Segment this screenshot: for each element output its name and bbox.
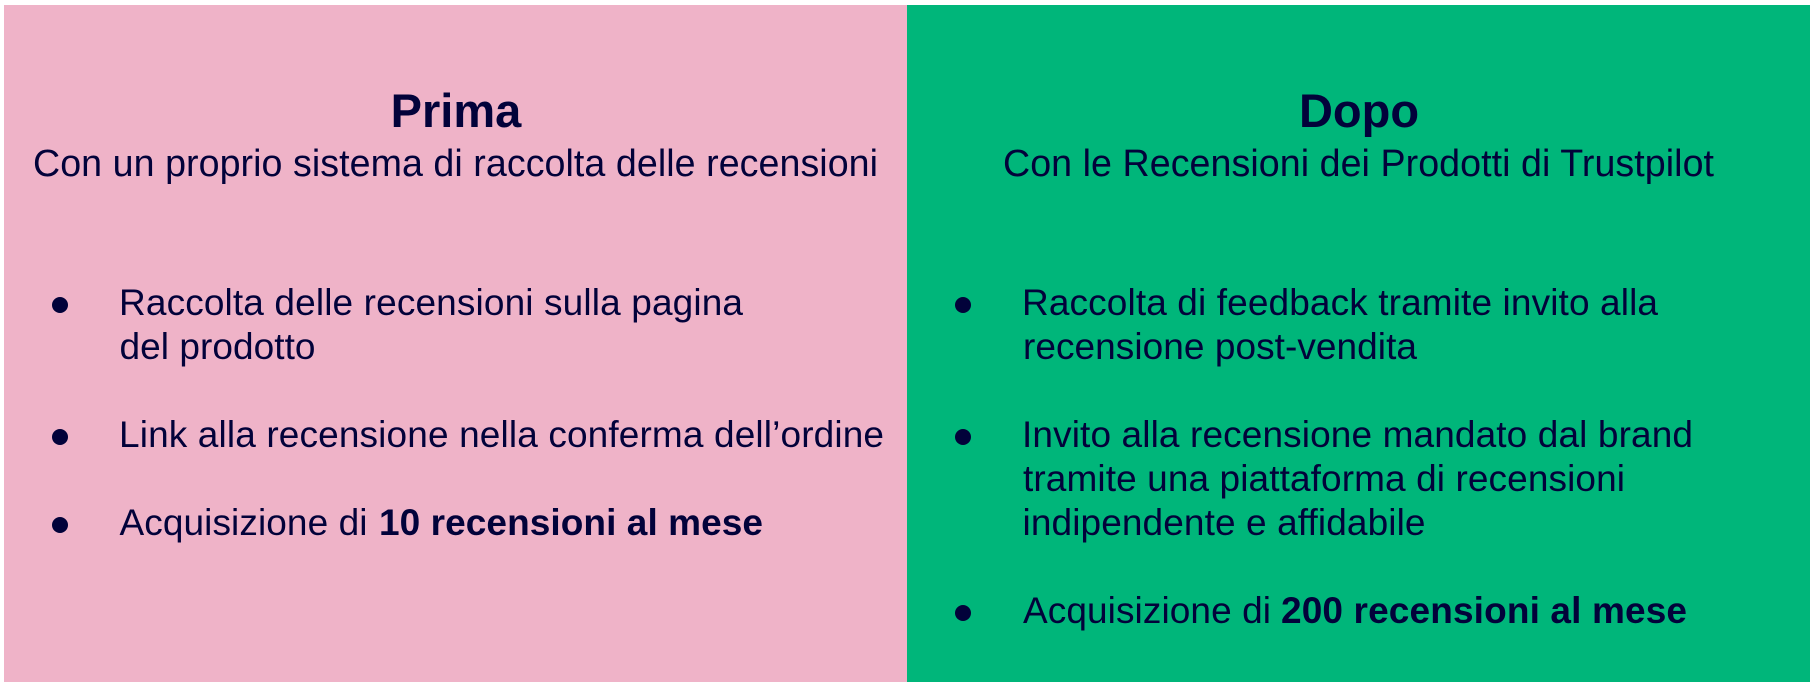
heading: Prima: Prima — [391, 84, 522, 137]
bullet: invito dal brand — [955, 414, 1693, 543]
bullet: 200 recensioni: 200 recensioni al mese — [1281, 590, 1687, 631]
bullet: feedback post-vendita — [955, 282, 1658, 367]
panel: Prima — [4, 5, 907, 682]
bullet: 10 recensioni — [52, 502, 763, 543]
bullet: raccolta sulla pagina: del prodotto — [120, 326, 316, 367]
bullet: 200 recensioni: Acquisizione di — [1023, 590, 1271, 631]
panel: Dopo — [907, 5, 1810, 682]
bullet: feedback post-vendita: recensione post-vendita — [1023, 326, 1417, 367]
bullet: 10 recensioni: 10 recensioni al mese — [379, 502, 763, 543]
subheading: Dopo: Con le Recensioni dei Prodotti di Trustpilot — [1003, 142, 1715, 184]
bullet: raccolta sulla pagina: Raccolta delle recensioni sulla pagina — [119, 282, 743, 323]
subheading: Prima: Con un proprio sistema di raccolta delle recensioni — [33, 142, 878, 184]
bullet: 10 recensioni: Acquisizione di — [120, 502, 368, 543]
heading: Dopo: Dopo — [1299, 84, 1419, 137]
bullet: invito dal brand: tramite una piattaforma di recensioni — [1023, 458, 1625, 499]
bullet: 200 recensioni — [955, 590, 1687, 631]
bullet: feedback post-vendita: Raccolta di feedback tramite invito alla — [1022, 282, 1658, 323]
bullet: link nella conferma: Link alla recensione nella conferma dell’ordine — [119, 414, 884, 455]
bullet: invito dal brand: indipendente e affidabile — [1022, 502, 1426, 543]
bullet: invito dal brand: Invito alla recensione mandato dal brand — [1022, 414, 1693, 455]
bullet: raccolta sulla pagina — [52, 282, 743, 367]
